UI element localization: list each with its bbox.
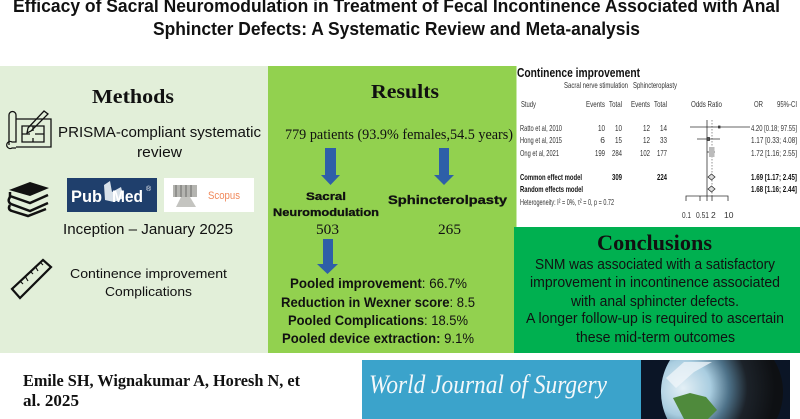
- group: sphincteroplasty: 265: [438, 222, 461, 238]
- text: patients: 779 patients (93.9% females,54.5 years): [285, 127, 513, 143]
- table header: Odds Ratio: [691, 99, 722, 109]
- group: sphincteroplasty: Sphincterolpasty: [388, 193, 507, 207]
- heading: continence improvement: Continence improvement: [517, 66, 641, 80]
- text: PRISMA: PRISMA-compliant systematic: [58, 124, 262, 141]
- table rows: 12: [643, 135, 650, 145]
- table rows: 10: [615, 123, 622, 133]
- text: pooled outcomes: Pooled Complications: 18.5%: [288, 312, 468, 328]
- heading: methods: Methods: [92, 86, 174, 108]
- table header: Study: [521, 99, 537, 109]
- table rows: Ong et al, 2021: [520, 148, 559, 158]
- table rows: 6: [600, 135, 605, 145]
- table header: OR: [754, 99, 763, 109]
- heading: results: Results: [371, 81, 439, 103]
- text: outcomes: Continence improvement: [70, 266, 227, 281]
- table rows: 12: [643, 123, 650, 133]
- table header: Events: [631, 99, 650, 109]
- text: search dates: Inception – January 2025: [63, 221, 233, 238]
- table rows: Random effects model: [520, 184, 583, 194]
- icon: blueprint: [7, 111, 51, 149]
- heading: conclusions: Conclusions: [597, 230, 712, 255]
- table header: Total: [609, 99, 622, 109]
- arrow: to pooled outcomes: [317, 239, 338, 274]
- text: PRISMA: [58, 124, 262, 161]
- logo: Scopus: Scopus: [208, 190, 240, 202]
- banner: World Journal of Surgery: [362, 360, 790, 419]
- table rows: 284: [612, 148, 622, 158]
- text: pooled outcomes: Pooled device extraction: 9.1%: [282, 330, 474, 346]
- table rows: Heterogeneity: I² = 0%, τ² = 0, p = 0.72: [520, 197, 614, 207]
- panel: results: [268, 66, 514, 353]
- table rows: 33: [660, 135, 667, 145]
- citation: [23, 371, 300, 410]
- logo: PubMed: ®: [146, 185, 152, 193]
- group: sacral neuromodulation: 503: [316, 222, 339, 238]
- logo: PubMed: Pub: [71, 187, 102, 206]
- chart axis labels: 0.51: [696, 210, 709, 220]
- arrow: to sphincteroplasty: [434, 148, 454, 185]
- table rows: 15: [615, 135, 622, 145]
- text: conclusions body: improvement in incontinence associated: [530, 274, 780, 291]
- text: conclusions body: [526, 256, 784, 346]
- title: Sphincter Defects: A Systematic Review and Meta-analysis: [153, 18, 640, 39]
- text: conclusions body: A longer follow-up is required to ascertain: [526, 310, 784, 327]
- text: conclusions body: these mid-term outcomes: [576, 329, 735, 346]
- table rows: 177: [657, 148, 667, 158]
- group: sphincteroplasty: [388, 193, 507, 238]
- icon: ruler: [12, 260, 51, 298]
- chart: odds ratio forest plot: [686, 120, 750, 201]
- table rows: 102: [640, 148, 650, 158]
- table rows: Common effect model: [520, 172, 582, 182]
- citation: al. 2025: [23, 391, 79, 410]
- text: pooled outcomes: Reduction in Wexner score: 8.5: [281, 294, 475, 310]
- group: sacral neuromodulation: Sacral: [306, 191, 346, 203]
- title: [13, 0, 780, 39]
- citation: Emile SH, Wignakumar A, Horesh N, et: [23, 371, 300, 390]
- icon: books: [9, 182, 49, 216]
- chart axis labels: 0.1: [682, 210, 691, 220]
- table rows: 199: [595, 148, 605, 158]
- group: sacral neuromodulation: [273, 191, 379, 238]
- table rows: 224: [657, 172, 667, 182]
- table header: Sacral nerve stimulation: [564, 80, 628, 90]
- table rows: 10: [598, 123, 605, 133]
- text: conclusions body: SNM was associated with a satisfactory: [535, 256, 775, 273]
- logo: PubMed: [67, 178, 157, 212]
- arrow: to sacral neuromodulation: [321, 148, 340, 185]
- table header: [521, 80, 797, 109]
- chart axis labels: 10: [724, 210, 734, 220]
- image: globe: [641, 360, 790, 419]
- table rows: [520, 123, 797, 207]
- group: sacral neuromodulation: Neuromodulation: [273, 207, 379, 219]
- text: pooled outcomes: [281, 275, 475, 346]
- table header: Total: [654, 99, 667, 109]
- text: outcomes: Complications: [105, 284, 193, 299]
- text: conclusions body: with anal sphincter defects.: [570, 293, 739, 310]
- table header: Sphincteroplasty: [633, 80, 678, 90]
- text: PRISMA: review: [137, 144, 182, 161]
- panel: forest plot: [514, 66, 800, 227]
- table rows: 309: [612, 172, 622, 182]
- chart axis labels: [682, 210, 734, 220]
- chart axis labels: 2: [711, 210, 716, 220]
- logo: Scopus: [164, 178, 254, 212]
- table rows: 14: [660, 123, 667, 133]
- banner title: World Journal of Surgery: [369, 370, 607, 399]
- table rows: Ratto et al, 2010: [520, 123, 562, 133]
- table header: Events: [586, 99, 605, 109]
- text: pooled outcomes: Pooled improvement: 66.7%: [290, 275, 467, 291]
- table rows: Hong et al, 2015: [520, 135, 562, 145]
- logo: PubMed: Med: [112, 187, 143, 206]
- text: outcomes: [70, 266, 227, 299]
- panel: conclusions: [514, 227, 800, 353]
- panel: methods: [0, 66, 268, 353]
